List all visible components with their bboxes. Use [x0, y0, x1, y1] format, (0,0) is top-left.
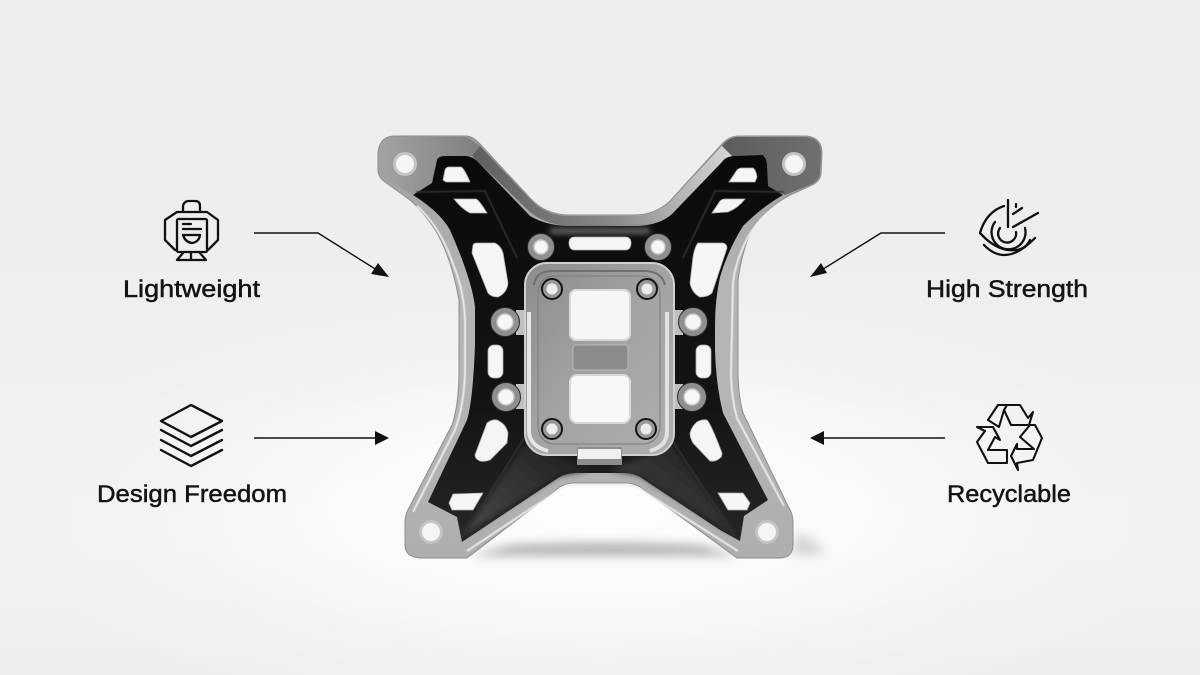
label: High Strength: [926, 276, 1088, 303]
icon: recycling symbol: [977, 405, 1042, 470]
frame side tabs: [516, 310, 683, 409]
arrow: [254, 233, 389, 277]
top-right ear: [722, 137, 821, 195]
web ribs: [416, 191, 784, 538]
rim highlights: [413, 200, 785, 551]
label: Recyclable: [947, 481, 1071, 508]
top-left ear: [379, 137, 480, 195]
corner and frame bolts: [394, 154, 804, 542]
arrow: [810, 233, 945, 277]
central plate: [525, 263, 674, 455]
black web: [413, 155, 783, 542]
icon: impact target: [980, 200, 1038, 255]
icon: backpack: [165, 201, 218, 260]
arrow: [810, 431, 945, 445]
valley rim shading: [472, 146, 732, 226]
callout: Recyclable: [810, 405, 1071, 508]
label: Design Freedom: [97, 481, 287, 508]
label: Lightweight: [123, 276, 260, 303]
callout: Lightweight: [123, 201, 389, 303]
icon: stacked layers: [161, 405, 222, 466]
callout: High Strength: [810, 200, 1088, 303]
plate clip: [577, 447, 622, 465]
arrow: [254, 431, 389, 445]
plate windows: [570, 290, 630, 340]
callout: Design Freedom: [97, 405, 389, 508]
plate recess: [573, 345, 628, 370]
frame cut-outs: [443, 167, 757, 510]
lower web sheen: [463, 228, 735, 535]
bracket product photo: [378, 136, 826, 558]
metal frame: [378, 136, 822, 558]
floor shadow: [470, 534, 826, 556]
